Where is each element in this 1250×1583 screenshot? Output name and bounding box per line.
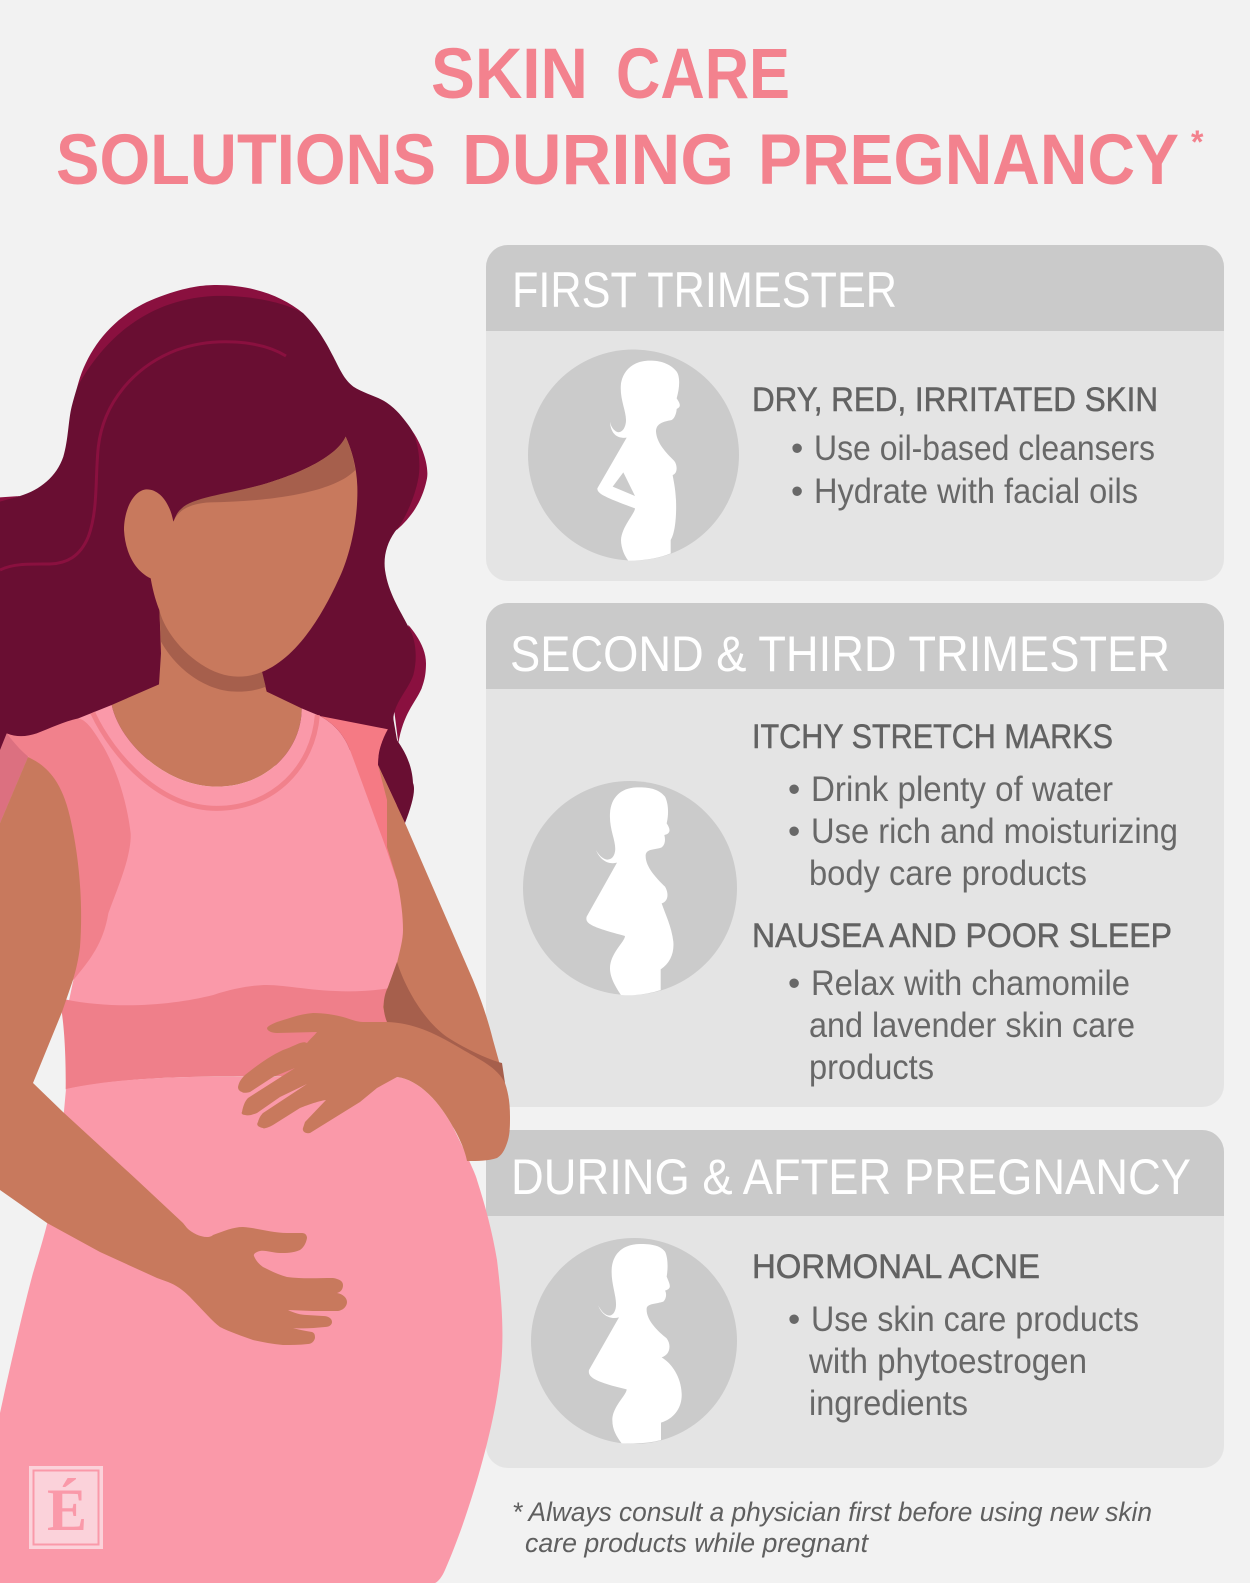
text: hormonal acne: Use skin care products <box>811 1300 1139 1339</box>
hair lock over shoulder <box>378 717 414 823</box>
text: nausea and poor sleep: • <box>788 964 800 1003</box>
text: dry red irritated skin: DRY, RED, IRRITATED SKIN <box>752 381 1158 419</box>
footnote: care products while pregnant <box>525 1528 869 1558</box>
text: dry red irritated skin: • <box>791 472 803 511</box>
text: itchy stretch marks: • <box>788 770 800 809</box>
text: nausea and poor sleep: and lavender skin care <box>809 1006 1135 1045</box>
footnote: * Always consult a physician first before using new skin <box>512 1497 1152 1527</box>
text: nausea and poor sleep: NAUSEA AND POOR SLEEP <box>752 917 1172 955</box>
text: itchy stretch marks <box>752 718 1178 893</box>
panel: second and third trimester <box>486 603 1224 1107</box>
text: hormonal acne: • <box>788 1300 800 1339</box>
text: nausea and poor sleep: products <box>809 1048 934 1087</box>
panel: first trimester <box>486 245 1224 581</box>
logo <box>29 1466 103 1549</box>
text: dry red irritated skin: Use oil-based cleansers <box>814 429 1155 468</box>
text: hormonal acne: ingredients <box>809 1384 968 1423</box>
panel: during and after pregnancy <box>486 1130 1224 1468</box>
heading: first trimester: FIRST TRIMESTER <box>512 262 897 318</box>
right arm and hand <box>238 765 510 1161</box>
text: hormonal acne: HORMONAL ACNE <box>752 1248 1040 1286</box>
text: itchy stretch marks: • <box>788 812 800 851</box>
text: nausea and poor sleep: Relax with chamomile <box>811 964 1130 1003</box>
dress <box>0 705 502 1583</box>
text: itchy stretch marks: ITCHY STRETCH MARKS <box>752 718 1113 756</box>
text: itchy stretch marks: Use rich and moisturizing <box>811 812 1178 851</box>
neck <box>112 607 302 787</box>
text: hormonal acne <box>752 1248 1139 1423</box>
title: DURING <box>462 121 734 200</box>
heading: second and third trimester: SECOND & THIRD TRIMESTER <box>510 626 1170 682</box>
text: nausea and poor sleep <box>752 917 1172 1087</box>
logo: É <box>47 1477 87 1543</box>
icon: silhouette late pregnancy <box>531 1238 737 1444</box>
title: PREGNANCY <box>758 121 1179 200</box>
text: itchy stretch marks: Drink plenty of water <box>811 770 1113 809</box>
left arm and hand <box>0 757 347 1345</box>
title <box>56 35 1204 200</box>
face <box>124 437 357 677</box>
title: CARE <box>616 35 790 114</box>
heading: during and after pregnancy: DURING & AFTER PREGNANCY <box>511 1149 1191 1205</box>
text: dry red irritated skin: Hydrate with facial oils <box>814 472 1138 511</box>
footnote <box>512 1497 1152 1558</box>
text: hormonal acne: with phytoestrogen <box>808 1342 1087 1381</box>
hair <box>0 285 427 823</box>
icon: silhouette early pregnancy <box>528 350 739 561</box>
title: SOLUTIONS <box>56 121 436 200</box>
text: dry red irritated skin: • <box>791 429 803 468</box>
title: SKIN <box>431 35 588 114</box>
text: itchy stretch marks: body care products <box>809 854 1087 893</box>
title: * <box>1191 124 1204 160</box>
illustration: pregnant woman <box>0 285 510 1583</box>
text: dry red irritated skin <box>752 381 1158 511</box>
icon: silhouette mid pregnancy <box>523 781 737 995</box>
